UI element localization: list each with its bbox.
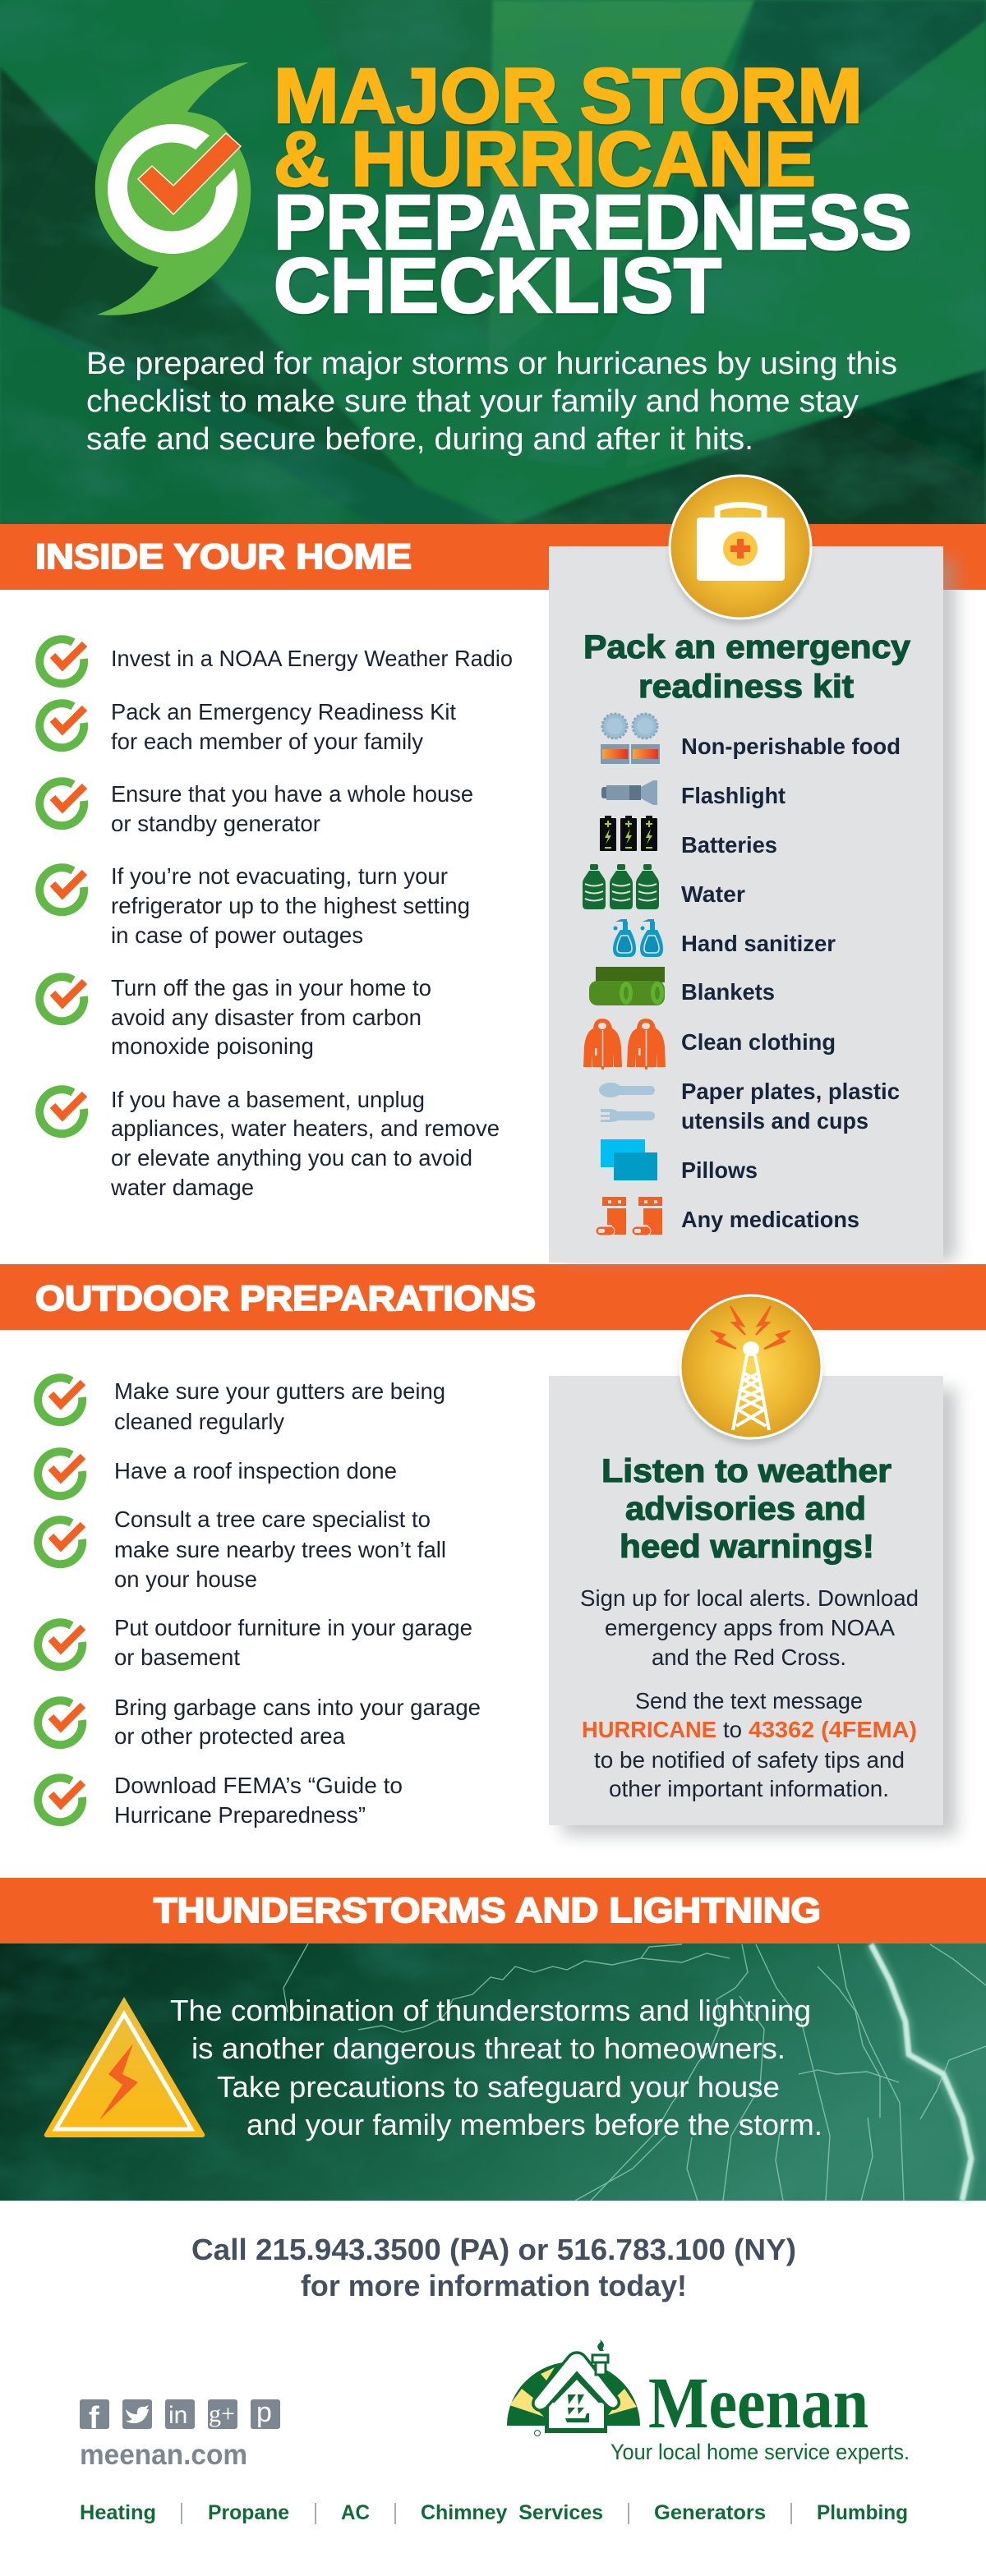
item: gutters: Make sure your gutters are being	[114, 1378, 445, 1404]
kit heading: Pack an emergency	[583, 629, 911, 665]
call to action	[191, 2233, 796, 2302]
item: garbage cans	[38, 1695, 481, 1749]
item: refrigerator	[39, 863, 470, 948]
item: gutters: cleaned regularly	[114, 1409, 284, 1434]
advisories body text: Sign up for local alerts. Download	[580, 1585, 919, 1611]
Meenan logo: Meenan	[648, 2363, 869, 2444]
item: water: Water	[681, 881, 745, 907]
advisories body text: HURRICANE	[582, 1717, 716, 1742]
item: furniture: or basement	[114, 1644, 240, 1670]
panel: weather advisories	[549, 1295, 956, 1835]
item: clean clothing: Clean clothing	[681, 1029, 836, 1055]
storm text: is another dangerous threat to homeowners.	[191, 2031, 786, 2065]
item: non-perishable food	[601, 714, 901, 764]
item: furniture	[38, 1615, 472, 1670]
icon: radio tower	[680, 1295, 822, 1444]
storm text: Take precautions to safeguard your house	[217, 2070, 780, 2104]
item: gas: Turn off the gas in your home to	[111, 975, 431, 1000]
item: basement: If you have a basement, unplug	[111, 1087, 425, 1112]
item: basement	[39, 1087, 500, 1200]
storm text: and your family members before the storm.	[246, 2108, 822, 2141]
item: pillows: Pillows	[681, 1157, 758, 1183]
item: basement: appliances, water heaters, and remove	[111, 1116, 500, 1141]
item: NOAA radio	[39, 639, 513, 683]
hero background	[0, 0, 986, 526]
services list	[80, 2501, 908, 2524]
advisories heading	[601, 1453, 892, 1565]
item: pillows	[601, 1139, 758, 1183]
item: furniture: Put outdoor furniture in your garage	[114, 1615, 472, 1640]
Meenan logo	[507, 2339, 910, 2464]
advisories body text: 43362 (4FEMA)	[749, 1717, 917, 1742]
intro text: safe and secure before, during and after it hits.	[86, 422, 753, 457]
item: blankets: Blankets	[681, 979, 775, 1005]
panel: storm background with lightning	[0, 1944, 986, 2201]
band: thunderstorms and lightning: THUNDERSTORMS AND LIGHTNING	[154, 1891, 821, 1930]
item: flashlight: Flashlight	[681, 783, 786, 808]
item: gas: monoxide poisoning	[111, 1033, 314, 1059]
item: tree care: make sure nearby trees won’t fall	[114, 1537, 446, 1562]
social icons: in	[168, 2402, 187, 2429]
item: clean clothing	[583, 1019, 836, 1070]
social icons: g+	[209, 2400, 235, 2427]
panel: emergency readiness kit	[549, 476, 956, 1263]
band: outdoor preparations: OUTDOOR PREPARATIONS	[35, 1279, 536, 1318]
item: blankets	[589, 967, 775, 1005]
advisories heading: advisories and	[625, 1491, 866, 1527]
band: inside your home: INSIDE YOUR HOME	[35, 537, 412, 577]
checklist: inside your home	[39, 639, 513, 1200]
item: water	[583, 864, 745, 909]
storm checkmark logo	[95, 62, 251, 315]
band: inside your home	[0, 524, 986, 590]
advisories body text: emergency apps from NOAA	[605, 1615, 896, 1640]
call to action: for more information today!	[301, 2269, 687, 2302]
icon: warning triangle	[44, 1997, 205, 2137]
item: basement: water damage	[110, 1175, 254, 1200]
item: tree care	[38, 1506, 446, 1592]
item: paper plates and utensils: utensils and cups	[681, 1108, 869, 1134]
intro text	[86, 347, 897, 457]
advisories body text: other important information.	[609, 1776, 889, 1801]
item: paper plates and utensils: Paper plates, plastic	[681, 1079, 900, 1104]
item: gas: avoid any disaster from carbon	[111, 1005, 422, 1030]
item: non-perishable food: Non-perishable food	[681, 734, 901, 759]
checklist: outdoor preparations	[38, 1378, 481, 1828]
advisories body text	[580, 1585, 919, 1801]
services list: Plumbing	[817, 2501, 908, 2524]
item: FEMA guide: Download FEMA’s “Guide to	[114, 1773, 403, 1798]
services list: Chimney Services	[421, 2501, 603, 2524]
services list: AC	[341, 2501, 370, 2524]
item: roof: Have a roof inspection done	[114, 1458, 397, 1484]
advisories body text: and the Red Cross.	[652, 1644, 846, 1670]
storm text	[170, 1994, 822, 2141]
title	[274, 53, 912, 329]
item: tree care: on your house	[114, 1566, 257, 1592]
band: outdoor preparations	[0, 1264, 986, 1330]
item: flashlight	[601, 780, 786, 808]
item: FEMA guide: Hurricane Preparedness”	[114, 1802, 366, 1828]
item: generator: or standby generator	[111, 811, 320, 836]
item: garbage cans: Bring garbage cans into your garage	[114, 1695, 481, 1720]
social icons	[80, 2397, 280, 2436]
item: generator: Ensure that you have a whole house	[111, 781, 473, 807]
advisories body text: to	[723, 1717, 742, 1742]
band: thunderstorms and lightning	[0, 1878, 986, 1944]
advisories body text: to be notified of safety tips and	[594, 1747, 905, 1773]
title: CHECKLIST	[274, 242, 721, 329]
item: refrigerator: refrigerator up to the highest setting	[111, 893, 470, 918]
item: gutters	[38, 1378, 445, 1434]
item: generator	[39, 781, 473, 836]
social icons: p	[256, 2397, 272, 2428]
item: basement: or elevate anything you can to avoid	[111, 1145, 472, 1171]
title: PREPAREDNESS	[274, 179, 912, 266]
item: readiness kit	[39, 699, 456, 754]
item: batteries: Batteries	[681, 832, 777, 858]
item: NOAA radio: Invest in a NOAA Energy Weather Radio	[111, 646, 513, 671]
kit heading: readiness kit	[638, 669, 854, 705]
intro text: Be prepared for major storms or hurricanes by using this	[86, 347, 897, 381]
item: paper plates and utensils	[599, 1079, 900, 1134]
title: & HURRICANE	[274, 116, 816, 203]
storm text: The combination of thunderstorms and lightning	[170, 1994, 811, 2027]
website: meenan.com	[80, 2439, 247, 2471]
item: hand sanitizer: Hand sanitizer	[681, 931, 836, 956]
item: medications: Any medications	[681, 1207, 859, 1232]
advisories body text: Send the text message	[635, 1688, 863, 1714]
item: tree care: Consult a tree care specialist to	[114, 1506, 431, 1532]
intro text: checklist to make sure that your family and home stay	[86, 384, 859, 419]
services list: Propane	[208, 2501, 289, 2524]
kit heading	[583, 629, 911, 705]
item: garbage cans: or other protected area	[114, 1723, 346, 1749]
item: medications	[596, 1197, 859, 1235]
services list: Generators	[654, 2501, 766, 2524]
icon: first aid kit	[670, 476, 811, 624]
item: refrigerator: in case of power outages	[111, 922, 363, 948]
item: refrigerator: If you’re not evacuating, turn your	[111, 863, 448, 889]
item: readiness kit: for each member of your family	[111, 729, 423, 754]
advisories heading: Listen to weather	[601, 1453, 892, 1489]
item: batteries	[600, 816, 777, 858]
item: roof	[38, 1451, 397, 1496]
item: hand sanitizer	[613, 919, 836, 957]
advisories heading: heed warnings!	[620, 1529, 874, 1565]
item: gas	[39, 975, 431, 1059]
social icons: f	[89, 2401, 99, 2436]
item: FEMA guide	[38, 1773, 403, 1828]
item: readiness kit: Pack an Emergency Readiness Kit	[111, 699, 456, 724]
title: MAJOR STORM	[274, 53, 863, 140]
services list: Heating	[80, 2501, 156, 2524]
Meenan logo: Your local home service experts.	[610, 2440, 910, 2464]
call to action: Call 215.943.3500 (PA) or 516.783.100 (NY)	[191, 2233, 796, 2266]
